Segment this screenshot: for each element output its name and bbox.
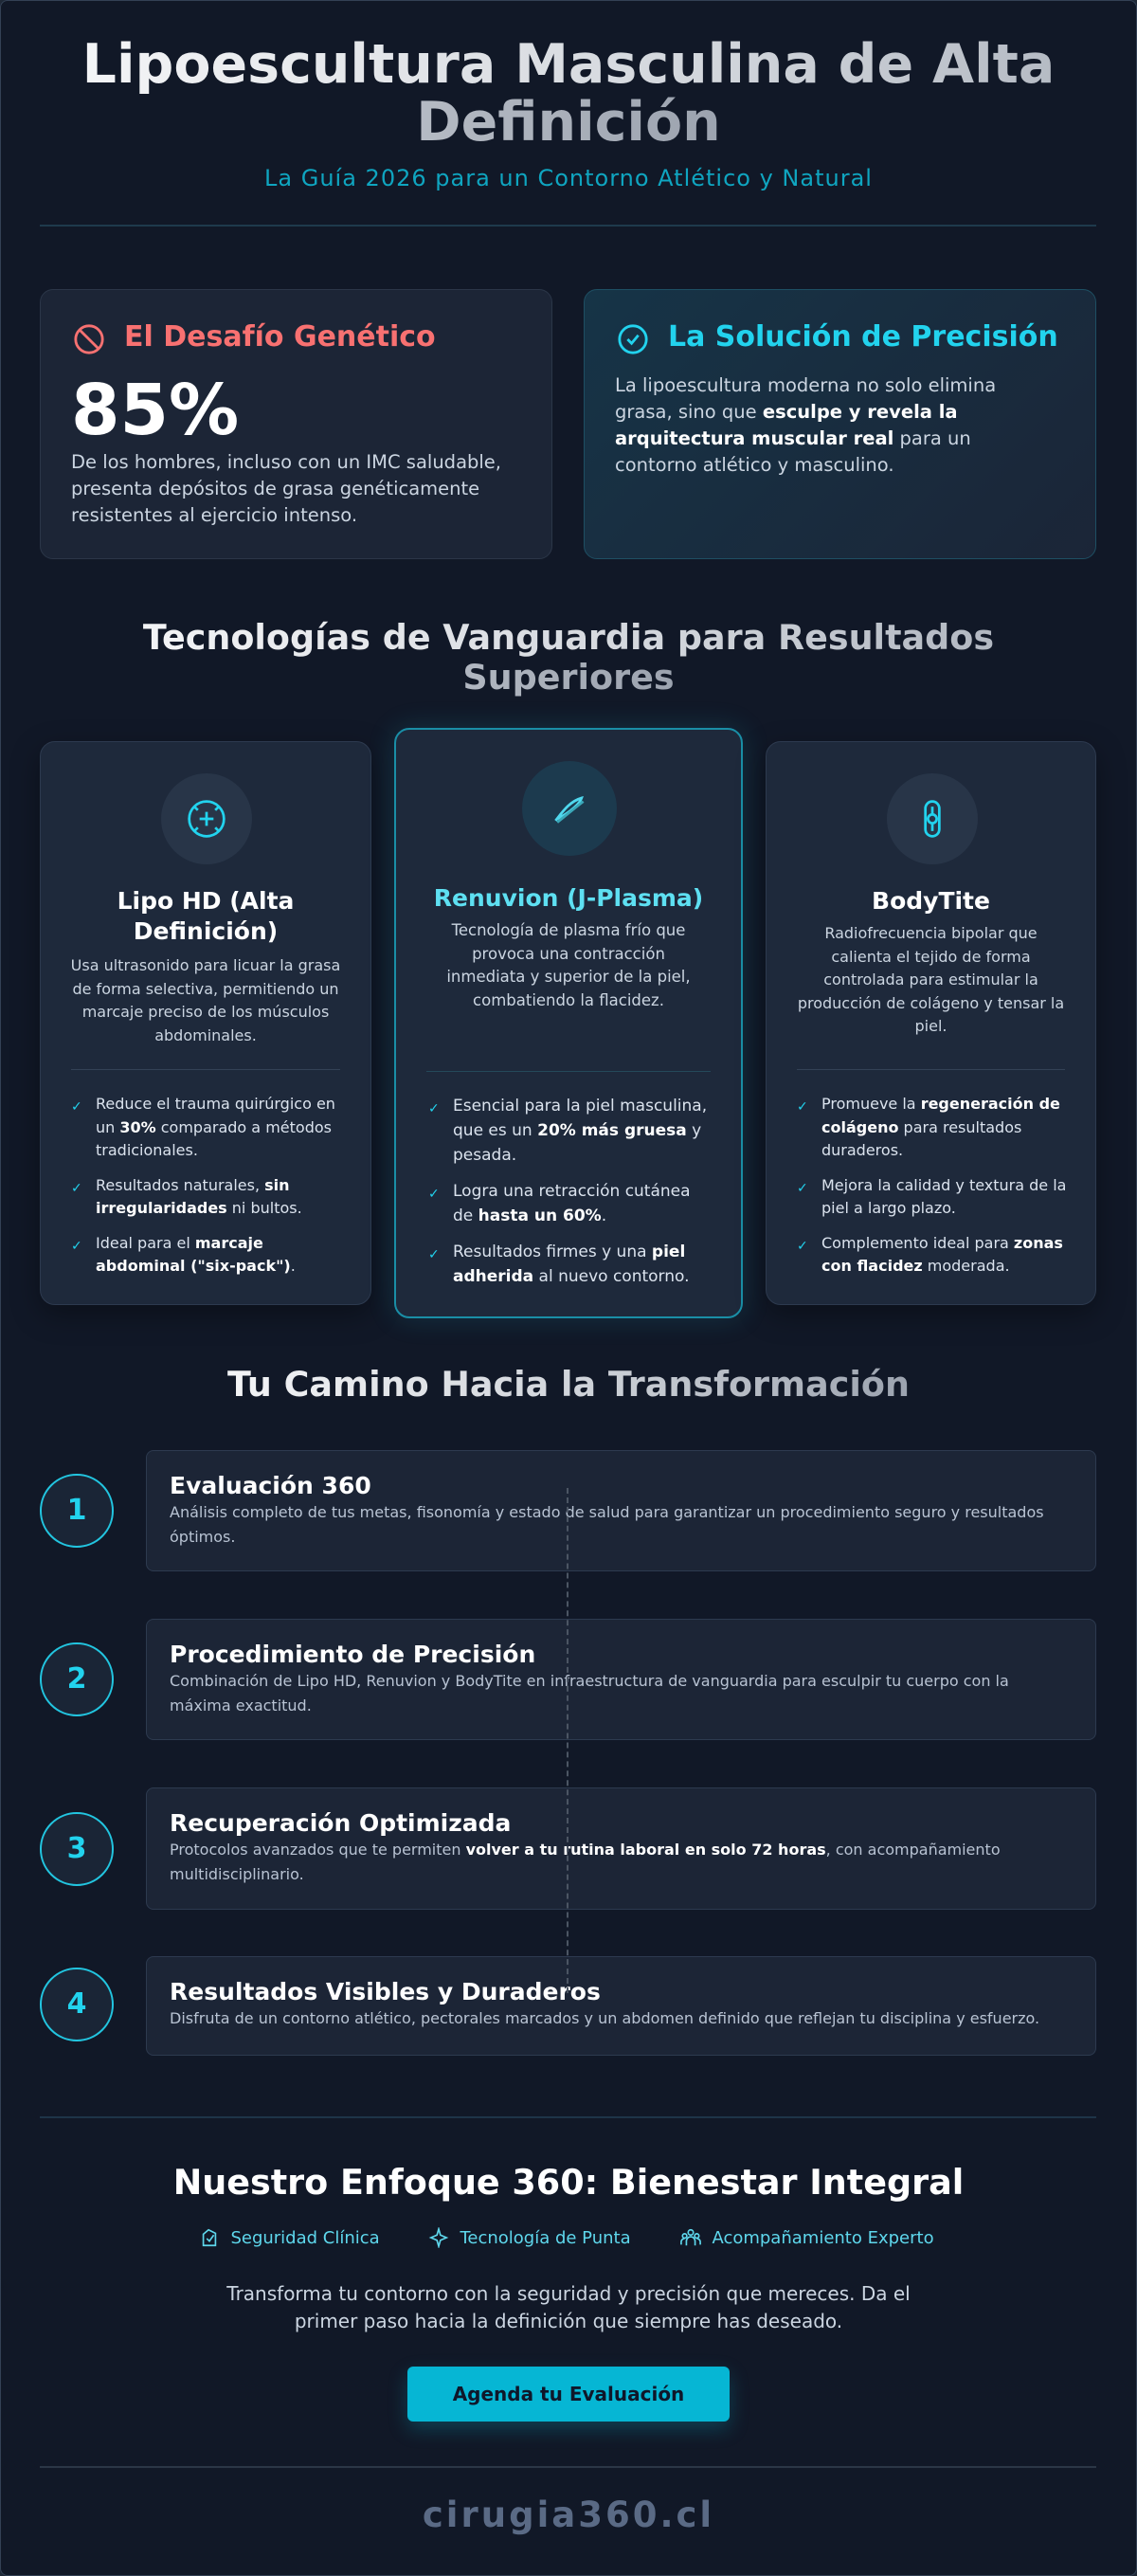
number 2: 2: [67, 1662, 86, 1696]
panel: genetic challenge: [40, 289, 552, 559]
icon: target: [161, 773, 252, 864]
features row: [203, 2227, 934, 2248]
card: [146, 1619, 1096, 1740]
description: de forma selectiva, permitiendo un: [72, 980, 339, 997]
section heading: path: Tu Camino Hacia la Transformación: [227, 1364, 910, 1405]
bullets: [799, 1095, 1066, 1275]
description: controlada para estimular la: [823, 971, 1038, 989]
title: BodyTite: [872, 887, 990, 915]
card: Evaluación 360: [170, 1472, 371, 1499]
icon: plasma pen: [522, 761, 617, 856]
icon: check circle: [618, 324, 648, 354]
bullets: [73, 1095, 335, 1275]
description: inmediata y superior de la piel,: [446, 968, 691, 986]
footer brand: cirugia360.cl: [423, 2494, 714, 2535]
number 1: [40, 1474, 114, 1548]
section heading: technologies: Superiores: [462, 657, 675, 698]
bullets: Esencial para la piel masculina, que es un 20% más gruesa y pesada.: [453, 1097, 707, 1165]
description: Tecnología de plasma frío que: [452, 921, 685, 939]
title: Definición: [416, 91, 721, 154]
title: Lipo HD (Alta: [117, 887, 294, 915]
text: La lipoescultura moderna no solo elimina grasa, sino que esculpe y revela la arquitectura muscular real para un contorno atlético y masculino.: [615, 374, 996, 476]
stat 85%: 85%: [71, 370, 239, 451]
description: [71, 956, 340, 1044]
step 4: [40, 1956, 1096, 2056]
title: [82, 33, 1055, 154]
feature: safety: Seguridad Clínica: [230, 2228, 380, 2248]
CTA button: [407, 2367, 730, 2422]
description: Radiofrecuencia bipolar que: [824, 924, 1038, 942]
card: Combinación de Lipo HD, Renuvion y BodyTite en infraestructura de vanguardia para esculpir tu cuerpo con la máxima exactitud.: [170, 1672, 1009, 1714]
card: Recuperación Optimizada: [170, 1809, 511, 1837]
text: De los hombres, incluso con un IMC saludable, presenta depósitos de grasa genéticamente resistentes al ejercicio intenso.: [71, 451, 501, 526]
description: marcaje preciso de los músculos: [82, 1003, 329, 1021]
description: piel.: [915, 1017, 947, 1035]
bullets: [430, 1097, 707, 1286]
bullets: Logra una retracción cutánea de hasta un 60%.: [453, 1182, 691, 1225]
card: Protocolos avanzados que te permiten volver a tu rutina laboral en solo 72 horas, con acompañamiento multidisciplinario.: [170, 1841, 1001, 1883]
CTA button: Agenda tu Evaluación: [453, 2383, 684, 2405]
number 1: 1: [67, 1494, 86, 1527]
heading: El Desafío Genético: [124, 320, 436, 354]
step 2: [40, 1619, 1096, 1740]
bullets: Promueve la regeneración de colágeno para resultados duraderos.: [821, 1095, 1060, 1159]
number 3: [40, 1812, 114, 1886]
bullets: Mejora la calidad y textura de la piel a largo plazo.: [821, 1175, 1066, 1217]
card: [146, 1956, 1096, 2056]
title: Renuvion (J-Plasma): [434, 884, 703, 912]
title: [117, 887, 294, 945]
number 4: [40, 1968, 114, 2041]
description: Usa ultrasonido para licuar la grasa: [71, 956, 340, 974]
step 3: [40, 1787, 1096, 1910]
card: [146, 1450, 1096, 1571]
section heading: technologies: Tecnologías de Vanguardia para Resultados: [143, 617, 994, 658]
icon: device: [887, 773, 978, 864]
card: Análisis completo de tus metas, fisonomía y estado de salud para garantizar un procedimiento seguro y resultados óptimos.: [170, 1503, 1044, 1546]
number 4: 4: [67, 1987, 86, 2021]
feature: technology: Tecnología de Punta: [460, 2228, 631, 2248]
description: producción de colágeno y tensar la: [798, 993, 1064, 1012]
card: [146, 1787, 1096, 1910]
bullets: Reduce el trauma quirúrgico en un 30% comparado a métodos tradicionales.: [96, 1095, 335, 1159]
number 2: [40, 1642, 114, 1716]
section heading: technologies: [143, 617, 994, 698]
panel: precision solution: [584, 289, 1096, 559]
description: [798, 924, 1064, 1035]
icon: prohibited: [74, 324, 104, 354]
panel: Renuvion: [394, 728, 743, 1318]
card: Procedimiento de Precisión: [170, 1641, 535, 1668]
title: Lipoescultura Masculina de Alta: [82, 33, 1055, 96]
bullets: Ideal para el marcaje abdominal ("six-pack").: [96, 1234, 296, 1275]
subtitle: La Guía 2026 para un Contorno Atlético y Natural: [264, 165, 873, 191]
bullets: Resultados firmes y una piel adherida al nuevo contorno.: [453, 1243, 690, 1286]
bullets: Complemento ideal para zonas con flacidez moderada.: [821, 1234, 1063, 1275]
description: abdominales.: [154, 1025, 257, 1044]
step 1: [40, 1450, 1096, 1571]
feature: expert: Acompañamiento Experto: [712, 2228, 934, 2248]
heading: enfoque 360: Nuestro Enfoque 360: Bienestar Integral: [173, 2162, 964, 2203]
panel: BodyTite: [766, 741, 1096, 1305]
number 3: 3: [67, 1832, 86, 1865]
bullets: Resultados naturales, sin irregularidades ni bultos.: [96, 1175, 302, 1217]
description: provoca una contracción: [472, 944, 665, 963]
description: [446, 921, 691, 1008]
description: calienta el tejido de forma: [831, 948, 1031, 965]
description: combatiendo la flacidez.: [473, 991, 664, 1008]
card: Disfruta de un contorno atlético, pectorales marcados y un abdomen definido que reflejan tu disciplina y esfuerzo.: [170, 2009, 1039, 2027]
card: Resultados Visibles y Duraderos: [170, 1978, 601, 2005]
panel: Lipo HD: [40, 741, 371, 1305]
heading: La Solución de Precisión: [668, 320, 1058, 354]
title: Definición): [134, 917, 278, 945]
closing paragraph: Transforma tu contorno con la seguridad y precisión que mereces. Da el primer paso hacia la definición que siempre has deseado.: [226, 2282, 911, 2332]
